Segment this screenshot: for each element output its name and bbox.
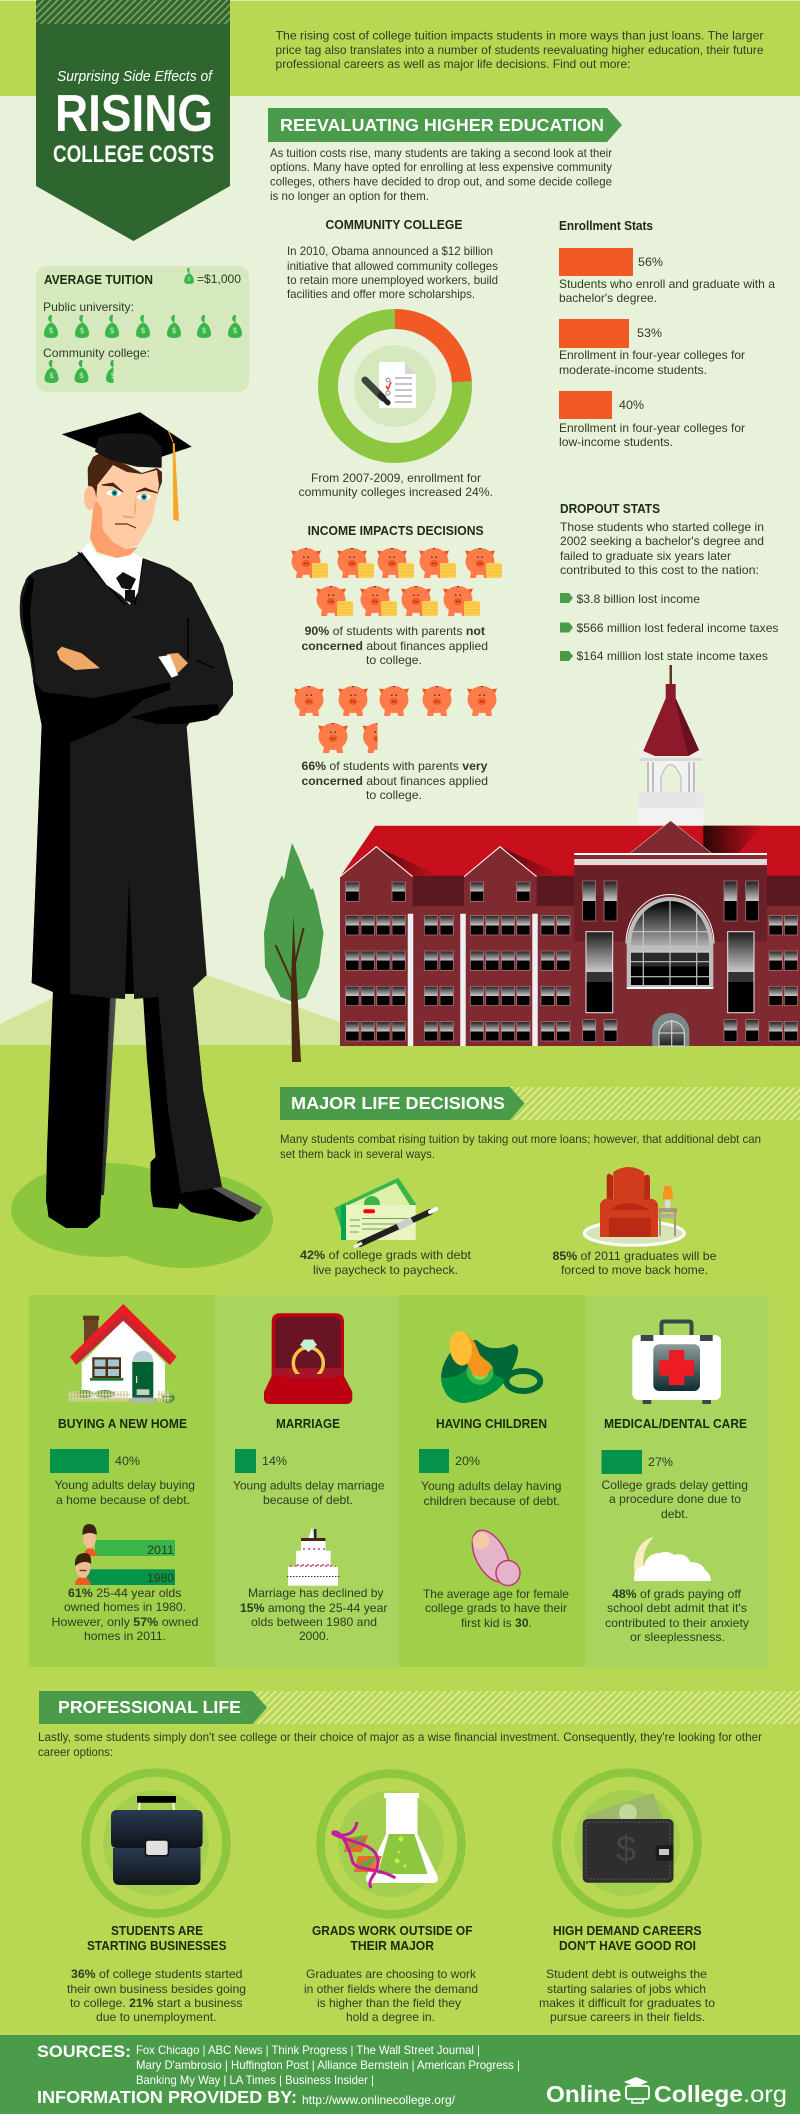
red roof bbox=[340, 826, 800, 877]
dropout stats column: 2002 seeking a bachelor's degree and bbox=[560, 534, 764, 548]
left hand bbox=[57, 647, 100, 670]
panel: medical and dental care: or sleeplessness. bbox=[630, 1630, 725, 1644]
panel: medical and dental care: 27% bbox=[648, 1455, 673, 1469]
panel: medical and dental care: 48% of grads paying off bbox=[612, 1587, 742, 1601]
income impacts decisions column: to college. bbox=[366, 653, 422, 667]
tower with spire bbox=[638, 665, 703, 848]
panel: average tuition: AVERAGE TUITION bbox=[44, 273, 153, 287]
section heading: professional life: PROFESSIONAL LIFE bbox=[58, 1697, 241, 1717]
career card: starting businesses: 36% of college students started bbox=[71, 1967, 242, 1981]
dropout stats column: $566 million lost federal income taxes bbox=[576, 621, 778, 635]
pictogram: piggy banks, 66% bbox=[294, 686, 497, 753]
white pilasters bbox=[410, 914, 535, 1046]
pictogram: piggy banks with coins, 90% bbox=[291, 548, 502, 616]
professional life intro: career options: bbox=[38, 1745, 113, 1759]
stat: move back home: 85% of 2011 graduates will be bbox=[552, 1249, 717, 1263]
career card: starting businesses: to college. 21% start a business bbox=[70, 1996, 243, 2010]
panel: medical and dental care: MEDICAL/DENTAL CARE bbox=[604, 1417, 747, 1431]
ground shadow under graduate bbox=[11, 1163, 273, 1268]
legs and shoes bbox=[46, 988, 262, 1228]
career card: outside major: GRADS WORK OUTSIDE OF bbox=[312, 1924, 473, 1938]
panel: average tuition: Public university: bbox=[43, 300, 134, 314]
panel: having children: The average age for female bbox=[423, 1587, 569, 1601]
dropout stats column bbox=[560, 502, 778, 663]
arched window bbox=[625, 894, 715, 990]
career card: outside major: is higher than the field they bbox=[317, 1996, 461, 2010]
major life decisions intro: set them back in several ways. bbox=[280, 1147, 435, 1161]
major life decisions intro: Many students combat rising tuition by taking out more loans; however, that additional debt can bbox=[280, 1132, 761, 1146]
logo: onlinecollege.org: .org bbox=[743, 2081, 787, 2107]
enrollment stats column: low-income students. bbox=[559, 435, 673, 449]
panel: average tuition bbox=[36, 266, 249, 392]
enrollment stats column bbox=[559, 219, 775, 449]
career card: outside major: hold a degree in. bbox=[346, 2010, 435, 2024]
career card: high demand careers bbox=[539, 1772, 715, 2024]
career card: high demand careers: Student debt is outweighs the bbox=[546, 1967, 707, 1981]
right cuff and hand bbox=[158, 653, 188, 678]
title banner: COLLEGE COSTS bbox=[53, 141, 214, 168]
career card: starting businesses: due to unemployment. bbox=[96, 2010, 216, 2024]
career card: high demand careers: makes it difficult for graduates to bbox=[539, 1996, 715, 2010]
career card: outside major: Graduates are choosing to work bbox=[306, 1967, 477, 1981]
logo: onlinecollege.org: Online bbox=[546, 2081, 622, 2107]
major life decisions intro bbox=[280, 1132, 761, 1161]
panel: buying a new home: homes in 2011. bbox=[84, 1629, 166, 1643]
stat: paycheck bbox=[300, 1248, 472, 1277]
title banner: RISING bbox=[55, 85, 213, 143]
gown shading bbox=[22, 552, 219, 994]
panel: marriage bbox=[215, 1295, 399, 1667]
icon: first aid kit bbox=[632, 1322, 721, 1404]
graduate character bbox=[20, 412, 262, 1228]
tree bbox=[264, 843, 324, 1062]
panel: medical and dental care: debt. bbox=[661, 1507, 688, 1521]
career card: high demand careers: DON'T HAVE GOOD ROI bbox=[559, 1939, 696, 1953]
income impacts decisions column: to college. bbox=[366, 788, 422, 802]
panel: having children: Young adults delay having bbox=[421, 1479, 562, 1493]
career card: starting businesses bbox=[67, 1772, 246, 2024]
income impacts decisions column: INCOME IMPACTS DECISIONS bbox=[308, 524, 484, 538]
dropout stats column: $164 million lost state income taxes bbox=[576, 649, 768, 663]
panel: buying a new home bbox=[29, 1295, 215, 1667]
community college column: From 2007-2009, enrollment for bbox=[311, 471, 481, 485]
section heading: major life decisions: MAJOR LIFE DECISIONS bbox=[291, 1093, 505, 1113]
bar: 53% bbox=[559, 319, 629, 348]
enrollment stats column: 40% bbox=[619, 398, 644, 412]
panel: buying a new home: However, only 57% owned bbox=[52, 1615, 198, 1629]
icon: briefcase in ring bbox=[86, 1772, 226, 1914]
sources: Fox Chicago | ABC News | Think Progress | The Wall Street Journal | bbox=[136, 2043, 480, 2057]
hair bbox=[88, 453, 162, 498]
panel: marriage: 14% bbox=[262, 1454, 287, 1468]
panel: marriage: 2000. bbox=[299, 1629, 329, 1643]
panel: having children bbox=[399, 1295, 585, 1667]
icon: ring box bbox=[264, 1313, 352, 1404]
information provided by: INFORMATION PROVIDED BY: bbox=[37, 2087, 297, 2107]
icon: wedding cake bbox=[287, 1527, 340, 1586]
stat: move back home: forced to move back home. bbox=[561, 1263, 708, 1277]
title banner bbox=[36, 0, 230, 241]
logo: onlinecollege.org bbox=[546, 2077, 787, 2107]
panel: marriage: MARRIAGE bbox=[276, 1417, 340, 1431]
stat: paycheck: 42% of college grads with debt bbox=[300, 1248, 472, 1262]
gown bbox=[20, 552, 233, 999]
side windows bbox=[346, 882, 798, 1041]
header band with introduction: professional careers as well as major life decisions. Find out more: bbox=[276, 57, 630, 71]
professional life intro: Lastly, some students simply don't see college or their choice of major as a wise financial investment. Consequently, they're looking for other bbox=[38, 1730, 762, 1744]
donut chart: enrollment increased 24% bbox=[328, 309, 472, 453]
sources: SOURCES: bbox=[37, 2042, 131, 2061]
panel: buying a new home: BUYING A NEW HOME bbox=[58, 1417, 187, 1431]
enrollment stats column: Students who enroll and graduate with a bbox=[559, 277, 775, 291]
dropout stats column: Those students who started college in bbox=[560, 520, 764, 534]
career card: outside major: in other fields where the demand bbox=[304, 1982, 478, 1996]
community college column: In 2010, Obama announced a $12 billion bbox=[287, 244, 493, 258]
section heading: major life decisions bbox=[280, 1087, 800, 1120]
section heading: reevaluating higher education: REEVALUATING HIGHER EDUCATION bbox=[280, 115, 604, 135]
brick walls bbox=[340, 847, 800, 1046]
college building bbox=[340, 665, 800, 1046]
section heading: professional life bbox=[39, 1691, 800, 1724]
panel: buying a new home: owned homes in 1980. bbox=[64, 1600, 186, 1614]
tassel bbox=[168, 430, 179, 521]
logo: onlinecollege.org: College bbox=[654, 2081, 743, 2107]
career card: high demand careers: HIGH DEMAND CAREERS bbox=[553, 1924, 702, 1938]
community college column: initiative that allowed community colleges bbox=[287, 259, 498, 273]
enrollment stats column: Enrollment Stats bbox=[559, 219, 653, 233]
mortarboard cap bbox=[62, 412, 192, 468]
panel: medical and dental care: a procedure done due to bbox=[609, 1492, 741, 1506]
panel: buying a new home: 61% 25-44 year olds bbox=[68, 1586, 182, 1600]
entrance door bbox=[652, 1013, 689, 1046]
icon: cheque and pen bbox=[334, 1178, 436, 1247]
panel: average tuition: =$1,000 bbox=[197, 272, 241, 286]
enrollment stats column: 56% bbox=[638, 255, 663, 269]
home ownership bars 2011 and 1980 bbox=[75, 1524, 175, 1585]
icon: pacifier bbox=[441, 1330, 540, 1403]
ear and neck bbox=[84, 486, 138, 558]
panel: having children: college grads to have their bbox=[425, 1601, 567, 1615]
panel: marriage: olds between 1980 and bbox=[251, 1615, 377, 1629]
panel: buying a new home: a home because of debt. bbox=[56, 1493, 190, 1507]
home ownership bars 2011 and 1980: 2011 bbox=[147, 1543, 174, 1557]
enrollment stats column: moderate-income students. bbox=[559, 363, 707, 377]
footer bbox=[0, 2035, 800, 2114]
panel: buying a new home: 40% bbox=[115, 1454, 140, 1468]
panel: having children: first kid is 30. bbox=[461, 1616, 532, 1630]
icon: swaddled baby bbox=[465, 1524, 520, 1588]
panel: medical and dental care: contributed to their anxiety bbox=[605, 1616, 749, 1630]
panel: marriage: because of debt. bbox=[263, 1493, 353, 1507]
icon: moon and cloud bbox=[634, 1537, 711, 1581]
dropout stats column: DROPOUT STATS bbox=[560, 502, 660, 516]
dropout stats column: $3.8 billion lost income bbox=[576, 592, 700, 606]
icon: house bbox=[68, 1304, 177, 1403]
dropout stats column: contributed to this cost to the nation: bbox=[560, 563, 759, 577]
panel: marriage: Young adults delay marriage bbox=[233, 1478, 385, 1492]
information provided by bbox=[37, 2087, 456, 2107]
sources: Mary D'ambrosio | Huffington Post | Alliance Bernstein | American Progress | bbox=[136, 2058, 520, 2072]
header band with introduction bbox=[0, 0, 800, 96]
panel: having children: 20% bbox=[455, 1454, 480, 1468]
stat: move back home bbox=[552, 1249, 717, 1277]
sources bbox=[37, 2042, 520, 2087]
career card: outside major bbox=[304, 1774, 478, 2024]
panel: average tuition: Community college: bbox=[43, 346, 150, 360]
community college column: to retain more unemployed workers, build bbox=[287, 273, 498, 287]
panel: medical and dental care bbox=[585, 1295, 769, 1667]
career card: starting businesses: STUDENTS ARE bbox=[111, 1924, 203, 1938]
reevaluating intro text: colleges, others have decided to drop out, and some decide college bbox=[270, 174, 612, 188]
bar: 40% bbox=[559, 391, 612, 419]
tie bbox=[116, 572, 136, 605]
community college column: facilities and offer more scholarships. bbox=[287, 287, 475, 301]
income impacts decisions column: 90% of students with parents not bbox=[305, 624, 485, 638]
reevaluating intro text: As tuition costs rise, many students are taking a second look at their bbox=[270, 146, 612, 160]
career card: high demand careers: pursue careers in their fields. bbox=[550, 2010, 705, 2024]
icon: flask and dna in ring bbox=[320, 1774, 462, 1914]
income impacts decisions column: concerned about finances applied bbox=[302, 639, 488, 653]
career card: high demand careers: starting salaries of jobs which bbox=[547, 1982, 706, 1996]
reevaluating intro text: is no longer an option for them. bbox=[270, 189, 429, 203]
section heading: reevaluating higher education bbox=[268, 108, 622, 142]
panel: medical and dental care: College grads delay getting bbox=[602, 1478, 748, 1492]
panel: buying a new home: Young adults delay buying bbox=[55, 1478, 195, 1492]
bar: 56% bbox=[559, 248, 633, 276]
title banner: Surprising Side Effects of bbox=[57, 68, 214, 85]
enrollment stats column: Enrollment in four-year colleges for bbox=[559, 348, 745, 362]
panel: having children: HAVING CHILDREN bbox=[436, 1417, 547, 1431]
income impacts decisions column: 66% of students with parents very bbox=[302, 759, 488, 773]
face bbox=[96, 465, 159, 549]
panel: medical and dental care: school debt admit that it's bbox=[607, 1601, 747, 1615]
central block bbox=[574, 821, 767, 1046]
collar bbox=[82, 542, 143, 600]
community college column bbox=[287, 218, 498, 499]
header band with introduction: The rising cost of college tuition impacts students in more ways than just loans. The larger bbox=[276, 28, 764, 42]
reevaluating intro text bbox=[270, 146, 612, 203]
enrollment stats column: bachelor's degree. bbox=[559, 291, 657, 305]
income impacts decisions column: concerned about finances applied bbox=[302, 774, 488, 788]
enrollment stats column: Enrollment in four-year colleges for bbox=[559, 421, 745, 435]
income impacts decisions column bbox=[291, 524, 502, 802]
career card: starting businesses: their own business besides going bbox=[67, 1982, 246, 1996]
panel: marriage: 15% among the 25-44 year bbox=[240, 1601, 388, 1615]
home ownership bars 2011 and 1980: 1980 bbox=[147, 1571, 174, 1585]
stat: paycheck: live paycheck to paycheck. bbox=[313, 1263, 458, 1277]
panel: having children: children because of debt. bbox=[424, 1494, 560, 1508]
enrollment stats column: 53% bbox=[637, 326, 662, 340]
icon: wallet with bills in ring bbox=[556, 1772, 698, 1914]
reevaluating intro text: options. Many have opted for enrolling at less expensive community bbox=[270, 160, 612, 174]
community college column: COMMUNITY COLLEGE bbox=[326, 218, 462, 232]
information provided by: http://www.onlinecollege.org/ bbox=[302, 2093, 456, 2107]
professional life intro bbox=[38, 1730, 762, 1759]
sources: Banking My Way | LA Times | Business Insider | bbox=[136, 2073, 374, 2087]
icon: armchair on rug with lamp bbox=[584, 1167, 684, 1245]
career card: outside major: THEIR MAJOR bbox=[350, 1939, 434, 1953]
dropout stats column: failed to graduate six years later bbox=[560, 549, 731, 563]
community college column: community colleges increased 24%. bbox=[298, 485, 493, 499]
icon: wallet with bills in ring: $ bbox=[616, 1828, 636, 1869]
header band with introduction: price tag also translates into a number of students reevaluating higher education, their future bbox=[276, 43, 764, 57]
career card: starting businesses: STARTING BUSINESSES bbox=[87, 1939, 226, 1953]
panel: marriage: Marriage has declined by bbox=[248, 1586, 384, 1600]
